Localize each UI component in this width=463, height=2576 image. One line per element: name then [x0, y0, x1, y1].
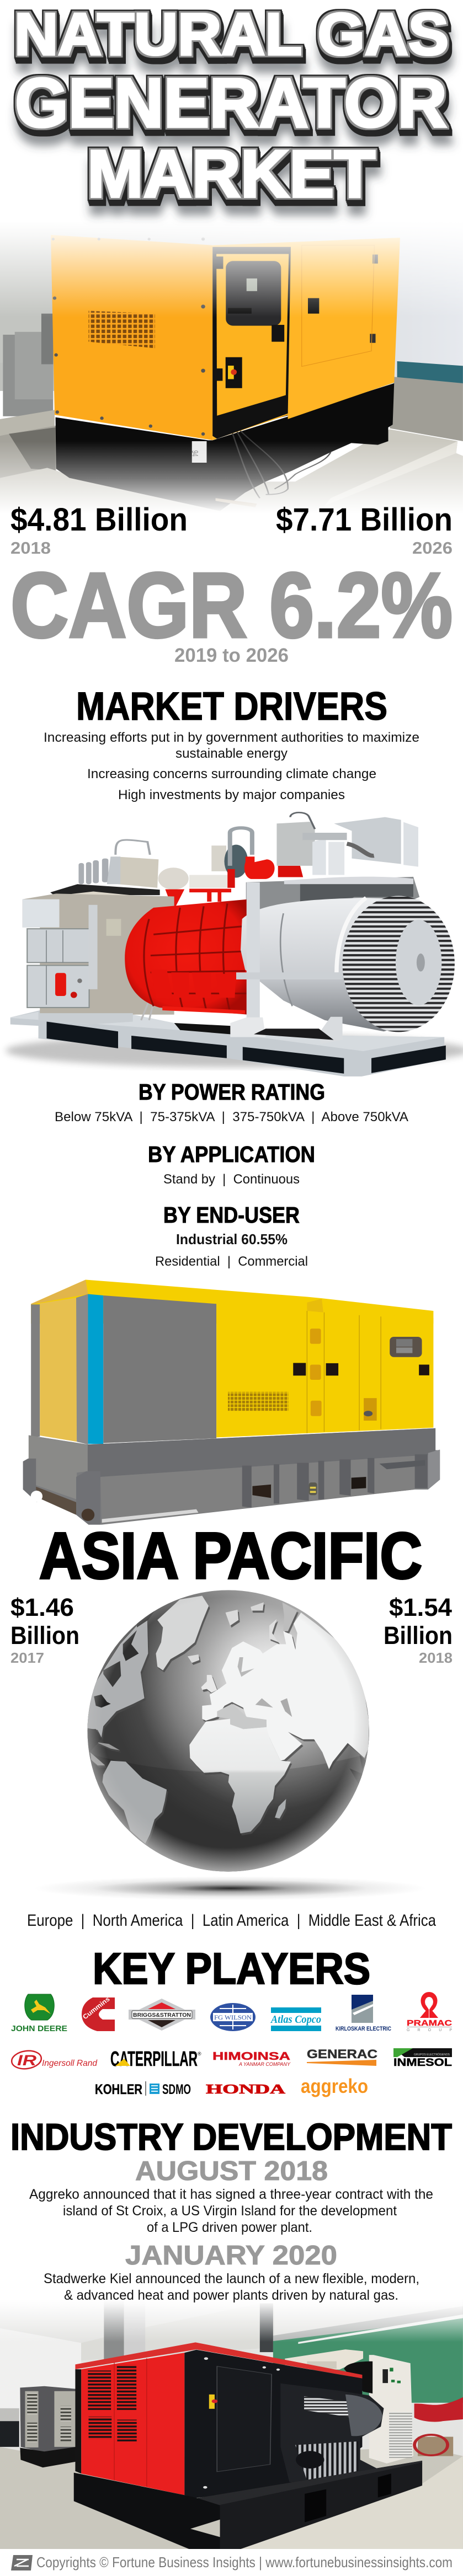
text: market driver list: High investments by major companies	[118, 788, 345, 802]
logo: Briggs and Stratton: BRIGGS&STRATTON	[133, 2012, 191, 2018]
illustration: yellow and grey generator set	[23, 1279, 440, 1525]
logo: Kohler SDMO: KOHLER	[95, 2082, 142, 2097]
development: August 2018: of a LPG driven power plant.	[147, 2220, 312, 2235]
text: market driver list: Increasing efforts put in by government authorities to maximize	[44, 730, 419, 745]
logo: Himoinsa	[212, 2050, 291, 2067]
logo: Atlas Copco	[270, 2007, 321, 2031]
segment: by application: BY APPLICATION	[148, 1142, 315, 1167]
logo: Himoinsa: HIMOINSA	[212, 2050, 290, 2063]
text: market driver list	[44, 730, 419, 802]
logo: Inmesol: GRUPOS ELECTRÓGENOS	[414, 2053, 450, 2056]
logo: Kirloskar Electric	[336, 1995, 391, 2032]
segment: by end-user	[155, 1202, 308, 1269]
logo: Pramac Group: PRAMAC	[407, 2018, 452, 2028]
stat: 2018 regional value: 2018	[419, 1650, 453, 1666]
segment: by power rating: Below 75kVA | 75-375kVA | 375-750kVA | Above 750kVA	[55, 1110, 408, 1124]
logo: Inmesol: INMESOL	[393, 2057, 452, 2069]
heading: key players: KEY PLAYERS	[93, 1944, 370, 1993]
logo: Generac	[307, 2047, 377, 2066]
logo: Inmesol	[393, 2048, 452, 2069]
logo: Himoinsa: A YANMAR COMPANY	[238, 2061, 291, 2067]
photo: industrial gas engine with red housing	[6, 812, 463, 1077]
logo: Honda: HONDA	[206, 2082, 286, 2097]
logo: Cummins: Cummins	[81, 1995, 111, 2021]
stat: 2026 market value	[276, 502, 453, 558]
logo: Caterpillar	[110, 2048, 201, 2071]
title: NATURAL GAS	[14, 1, 449, 67]
development: August 2018: AUGUST 2018	[135, 2156, 328, 2186]
development: January 2020: JANUARY 2020	[125, 2241, 337, 2270]
icon: grey globe with shadow	[34, 1590, 427, 1900]
logo: Ingersoll Rand: IR	[17, 2052, 37, 2069]
text: market driver list: Increasing concerns surrounding climate change	[87, 767, 376, 781]
photo: red and black generator in workshop	[0, 2300, 463, 2549]
segment: by end-user: Residential | Commercial	[155, 1254, 308, 1269]
logo: Caterpillar: CATERPILLAR	[110, 2048, 198, 2071]
stat: 2018 market value: 2018	[10, 538, 51, 558]
stat: 2018 regional value	[384, 1593, 453, 1666]
segment: by power rating	[55, 1079, 408, 1124]
development: August 2018	[29, 2156, 433, 2235]
development: August 2018: Aggreko announced that it has signed a three-year contract with the	[29, 2187, 433, 2202]
logo: Kirloskar Electric: KIRLOSKAR ELECTRIC	[336, 2026, 391, 2032]
stat: 2018 market value: $4.81 Billion	[10, 502, 188, 538]
development: January 2020	[44, 2241, 419, 2303]
title	[14, 1, 449, 211]
logo: FG Wilson: FG WILSON	[214, 2013, 252, 2021]
development: January 2020: Stadwerke Kiel announced the launch of a new flexible, modern,	[44, 2271, 419, 2286]
logo: Ingersoll Rand	[10, 2049, 98, 2071]
logo: Kohler SDMO: SDMO	[162, 2082, 191, 2097]
development: August 2018: island of St Croix, a US Virgin Island for the development	[63, 2203, 397, 2219]
logo: John Deere: JOHN DEERE	[11, 2024, 67, 2033]
segment: by end-user: BY END-USER	[163, 1202, 300, 1228]
logo: Atlas Copco: Atlas Copco	[270, 2013, 321, 2026]
photo: yellow enclosed generator: 94	[190, 451, 200, 457]
photo: yellow enclosed generator	[0, 221, 463, 537]
logo: FG Wilson	[210, 2003, 256, 2031]
stat: 2018 market value	[10, 502, 188, 558]
segment: by application	[148, 1142, 315, 1187]
logo: Pramac Group	[407, 1993, 452, 2032]
logo: Generac: GENERAC	[307, 2047, 377, 2061]
stat: 2017 regional value: $1.46	[10, 1593, 74, 1621]
logo: Cummins	[81, 1995, 115, 2031]
heading: market drivers: MARKET DRIVERS	[76, 685, 387, 729]
logo: Briggs and Stratton	[129, 1999, 195, 2031]
logo: Caterpillar: ®	[198, 2051, 201, 2056]
stat: 2026 market value: 2026	[412, 538, 453, 558]
stat: 2026 market value: $7.71 Billion	[276, 502, 453, 538]
logo: Pramac Group: GROUP	[407, 2028, 452, 2032]
logo: Kohler SDMO	[95, 2081, 191, 2097]
stat: 2017 regional value	[10, 1593, 79, 1666]
stat: 2017 regional value: Billion	[10, 1621, 79, 1650]
title: GENERATOR	[15, 64, 447, 142]
segment: by application: Stand by | Continuous	[163, 1172, 300, 1187]
heading: asia pacific: ASIA PACIFIC	[39, 1519, 422, 1593]
logo: Ingersoll Rand: Ingersoll Rand	[42, 2059, 98, 2068]
development: January 2020: & advanced heat and power plants driven by natural gas.	[64, 2288, 398, 2303]
segment: by end-user: Industrial 60.55%	[176, 1231, 288, 1247]
stat: 2018 regional value: $1.54	[389, 1593, 452, 1621]
stat: CAGR: 2019 to 2026	[174, 645, 289, 666]
title: MARKET	[87, 136, 375, 211]
text: market driver list: sustainable energy	[175, 746, 288, 761]
logo: Aggreko: aggreko	[301, 2075, 368, 2097]
stat: 2017 regional value: 2017	[10, 1650, 44, 1666]
logo: John Deere	[11, 1994, 67, 2033]
stat: 2018 regional value: Billion	[384, 1621, 453, 1650]
segment: by power rating: BY POWER RATING	[139, 1079, 325, 1105]
